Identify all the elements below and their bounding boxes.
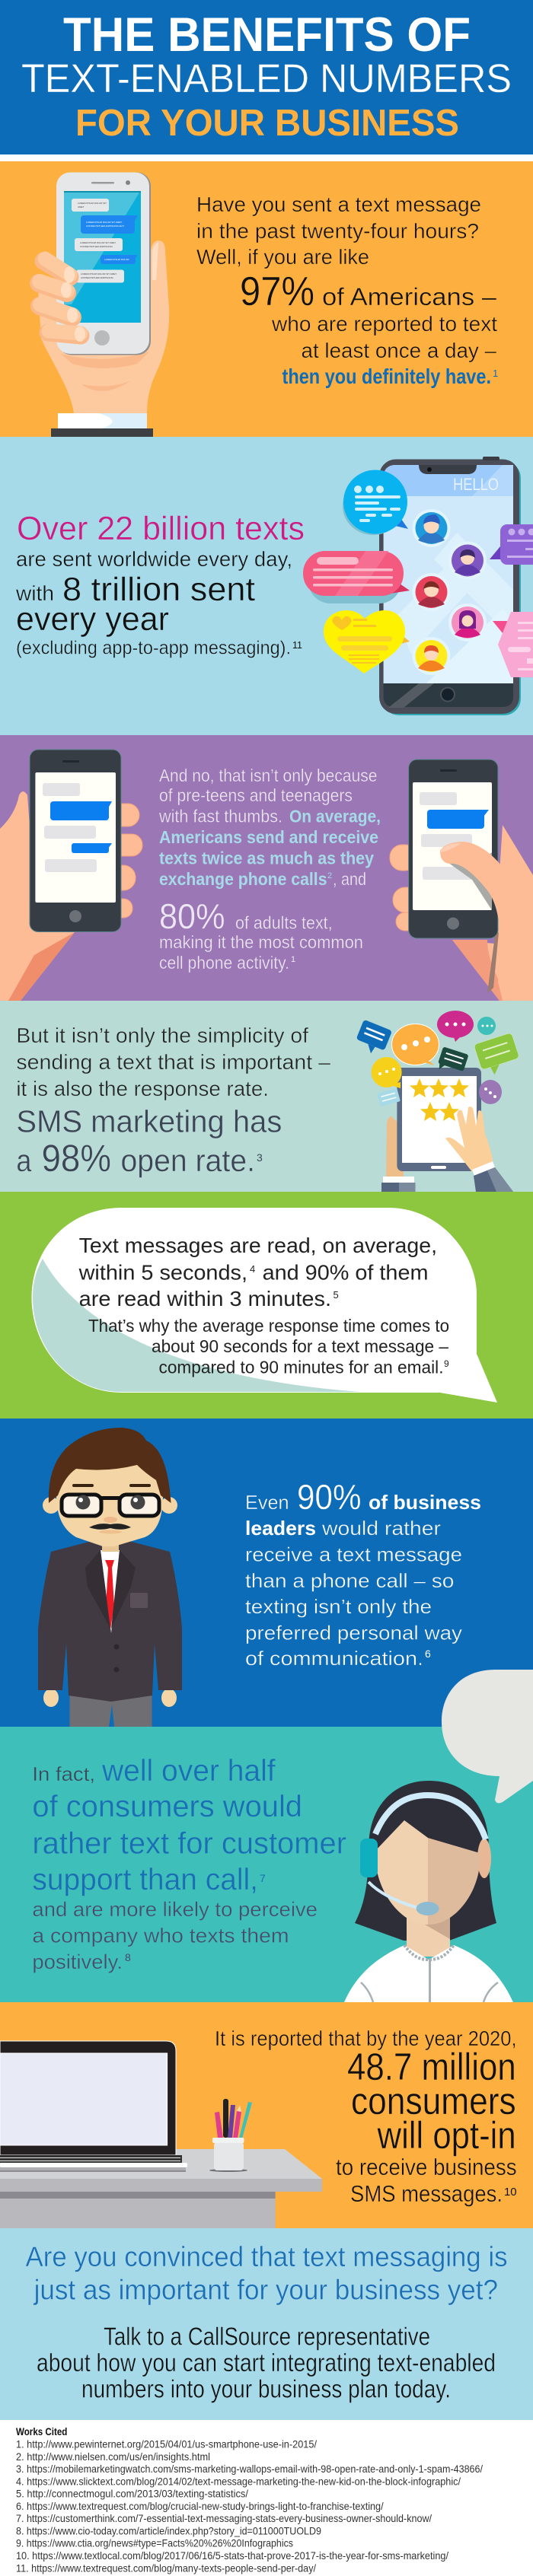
text block: 22 billion texts: 11: [292, 639, 302, 651]
text block: customer support: positively.: [32, 1950, 123, 1973]
text block: intro: Well, if you are like: [196, 245, 369, 269]
text block: customer support: [32, 1754, 346, 1973]
laptop: [0, 2041, 187, 2172]
text block: open rate: 3: [257, 1151, 263, 1164]
text block: open rate: it is also the response rate.: [16, 1077, 269, 1100]
panel: works cited: 3. https://mobilemarketingwatch.com/sms-marketing-wallops-email-with-98-open-rate-and-only-1-spam-43866/: [16, 2463, 483, 2475]
text block: intro: Have you sent a text message: [196, 193, 481, 216]
text block: customer support: support than call,: [32, 1863, 258, 1896]
text block: fast thumbs: , and: [333, 869, 366, 889]
title: FOR YOUR BUSINESS: [75, 103, 459, 144]
question heading: [26, 2241, 507, 2306]
text block: 48.7 million consumers: to receive business: [336, 2154, 517, 2180]
icon: hand holding phone: CONSECTETUER ADIPISCING: [81, 276, 114, 279]
text block: call to action: Talk to a CallSource representative: [104, 2323, 430, 2351]
panel: call to action: [0, 2228, 533, 2420]
title: [21, 8, 512, 144]
text block: 48.7 million consumers: SMS messages.: [350, 2180, 503, 2207]
text block: 48.7 million consumers: consumers: [351, 2080, 516, 2122]
text block: fast thumbs: Americans send and receive: [159, 827, 378, 847]
text block: fast thumbs: with fast thumbs.: [158, 807, 282, 826]
panel: works cited: 4. https://www.slicktext.com/blog/2014/02/text-message-marketing-the-new-kid-on-the-block-infographic/: [16, 2475, 461, 2487]
panel: header: [0, 0, 533, 154]
text block: business leaders: leaders: [245, 1517, 316, 1540]
icon: hand holding phone: LOREM IPSUM DOLOR SIT AMET,: [86, 221, 123, 224]
text block: fast thumbs: exchange phone calls: [159, 869, 327, 889]
text block: 22 billion texts: every year: [16, 600, 169, 638]
text block: business leaders: of communication.: [245, 1647, 423, 1670]
icon: hand holding phone: CONSECTETUER ADIPISCING ELIT: [86, 224, 124, 228]
text block: customer support: In fact,: [32, 1762, 95, 1785]
text block: business leaders: receive a text message: [245, 1543, 462, 1566]
panel: works cited: 7. https://customerthink.com/7-essential-text-messaging-stats-every-business-owner-should-know/: [16, 2512, 432, 2524]
text block: business leaders: texting isn’t only the: [245, 1595, 432, 1618]
panel: works cited: 10. https://www.textlocal.com/blog/2017/06/16/5-stats-that-prove-2017-is-the-year-for-sms-marketing/: [16, 2549, 448, 2562]
text block: fast thumbs: 80%: [159, 896, 225, 936]
text block: open rate: a: [16, 1143, 32, 1178]
text block: open rate: SMS marketing has: [16, 1103, 282, 1138]
bubbles: [353, 1011, 522, 1107]
text block: response time: compared to 90 minutes for an email.: [158, 1358, 443, 1377]
text block: 48.7 million consumers: 10: [504, 2186, 517, 2199]
text block: fast thumbs: of pre-teens and teenagers: [159, 785, 353, 805]
text block: 22 billion texts: Over 22 billion texts: [17, 510, 305, 547]
text block: fast thumbs: On average,: [289, 807, 381, 826]
text block: customer support: a company who texts them: [32, 1924, 289, 1947]
text block: 22 billion texts: [15, 510, 305, 659]
text block: customer support: well over half: [101, 1754, 276, 1788]
avatar: yellow: [413, 637, 451, 675]
icon: right hand tapping phone: [390, 759, 533, 1001]
text block: fast thumbs: And no, that isn’t only because: [159, 766, 378, 785]
bubble: pink: [303, 551, 410, 603]
panel: business leaders: [0, 1419, 533, 1727]
panel: orange intro: [0, 161, 533, 437]
panel: works cited: 6. https://www.textrequest.com/blog/crucial-new-study-brings-light-to-franchise-texting/: [16, 2500, 384, 2512]
text block: customer support: 7: [260, 1872, 266, 1884]
text block: intro: 97%: [240, 269, 314, 314]
icon: businessman: [38, 1428, 182, 1727]
pen cup: [209, 2099, 252, 2172]
text block: 48.7 million consumers: will opt-in: [377, 2114, 516, 2157]
text block: 48.7 million consumers: [215, 2027, 517, 2207]
icon: hand holding phone: LOREM IPSUM DOLOR SIT AMET,: [81, 272, 117, 275]
text block: call to action: [37, 2323, 496, 2403]
text block: response time: and 90% of them: [263, 1261, 428, 1285]
text block: 22 billion texts: 8 trillion sent: [62, 571, 255, 608]
text block: open rate: 98%: [41, 1137, 111, 1180]
text block: fast thumbs: making it the most common: [159, 932, 363, 952]
panel: 48.7 million consumers: [0, 2002, 533, 2228]
panel: works cited: 9. https://www.ctia.org/news#type=Facts%20%26%20Infographics: [16, 2537, 293, 2549]
speech bubble: [32, 1208, 497, 1403]
panel: open rate: [0, 1001, 533, 1192]
text block: business leaders: 6: [425, 1648, 431, 1660]
text block: customer support: 8: [125, 1951, 131, 1963]
text block: open rate: open rate.: [120, 1143, 255, 1178]
bubble: yellow heart: [324, 610, 410, 673]
text block: intro: in the past twenty-four hours?: [196, 219, 479, 243]
panel: works cited: 1. http://www.pewinternet.org/2015/04/01/us-smartphone-use-in-2015/: [16, 2438, 317, 2450]
text block: response time: 5: [334, 1289, 339, 1301]
text block: 22 billion texts: with: [15, 581, 54, 605]
panel: works cited: 5. http://connectmogul.com/2013/03/texting-statistics/: [16, 2488, 248, 2500]
icon: tablet with rating stars and chat bubbles: [353, 1011, 522, 1192]
question heading: Are you convinced that text messaging is: [26, 2241, 507, 2272]
title: TEXT-ENABLED NUMBERS: [21, 56, 512, 101]
text block: response time: within 5 seconds,: [78, 1261, 247, 1285]
icon: hand holding phone: AMET: [78, 205, 85, 209]
icon: support agent with headset: [344, 1781, 513, 2002]
icon: smartphone with chat bubbles: HELLO: [453, 475, 499, 494]
text block: open rate: [16, 1024, 330, 1180]
panel: response time: [0, 1192, 533, 1419]
text block: business leaders: would rather: [321, 1517, 441, 1540]
text block: intro: 1: [493, 368, 498, 379]
icon: smartphone with chat bubbles: [303, 457, 533, 715]
icon: hand holding phone: CONSECTETUER ADIPISCING: [80, 245, 113, 248]
avatar: red: [413, 573, 451, 611]
icon: hand holding phone: [38, 172, 169, 437]
text block: fast thumbs: of adults text,: [235, 913, 333, 933]
text block: intro: at least once a day –: [302, 339, 496, 362]
text block: intro: of Americans –: [322, 283, 496, 310]
text block: business leaders: [245, 1477, 481, 1670]
text block: intro: [196, 193, 498, 388]
text block: call to action: numbers into your business plan today.: [81, 2375, 451, 2403]
avatar: boy blue: [413, 509, 451, 547]
text block: 22 billion texts: are sent worldwide every day,: [16, 547, 292, 571]
title: THE BENEFITS OF: [63, 8, 471, 62]
text block: intro: who are reported to text: [271, 312, 497, 336]
bubble: blue: [343, 470, 408, 535]
icon: hand holding phone: LOREM IPSUM DOLOR: [104, 258, 129, 261]
icon: laptop on desk: [0, 2041, 322, 2228]
text block: customer support: of consumers would: [32, 1790, 302, 1823]
text block: fast thumbs: texts twice as much as they: [159, 848, 374, 868]
avatar: pink: [448, 603, 487, 642]
text block: fast thumbs: cell phone activity.: [159, 953, 289, 973]
text block: intro: then you definitely have.: [282, 365, 491, 388]
text block: customer support: and are more likely to perceive: [32, 1898, 318, 1921]
text block: response time: are read within 3 minutes.: [79, 1287, 331, 1310]
text block: business leaders: preferred personal way: [245, 1621, 462, 1644]
panel: works cited: 2. http://www.nielsen.com/us/en/insights.html: [16, 2450, 210, 2463]
text block: open rate: sending a text that is important –: [16, 1050, 330, 1074]
icon: hand holding phone: LOREM IPSUM DOLOR SIT AMET,: [80, 241, 116, 244]
bubble: pink hexagon: [493, 612, 533, 677]
panel: 22 billion texts: [0, 437, 533, 735]
text block: response time: [78, 1234, 449, 1377]
hand: right tapping: [445, 1107, 513, 1192]
bubble: purple: [490, 524, 533, 565]
text block: fast thumbs: 2: [327, 871, 332, 880]
text block: open rate: But it isn’t only the simplicity of: [16, 1024, 308, 1047]
text block: business leaders: 90%: [297, 1477, 361, 1517]
text block: response time: Text messages are read, on average,: [79, 1234, 437, 1257]
text block: customer support: rather text for customer: [32, 1827, 346, 1861]
text block: response time: 9: [444, 1358, 449, 1369]
text block: response time: 4: [250, 1263, 255, 1275]
avatar: purple: [448, 542, 487, 580]
text block: fast thumbs: 1: [291, 955, 295, 964]
panel: works cited: 11. https://www.textrequest.com/blog/many-texts-people-send-per-day/: [16, 2562, 316, 2574]
icon: hand holding phone: LOREM IPSUM DOLOR SIT: [78, 202, 107, 205]
text block: business leaders: Even: [245, 1491, 289, 1514]
speech bubble: grey: [442, 1670, 533, 1803]
hand: left: [381, 1116, 416, 1192]
text block: fast thumbs: [158, 766, 381, 973]
question heading: just as important for your business yet?: [34, 2275, 498, 2306]
panel: works cited: Works Cited: [16, 2425, 67, 2437]
text block: business leaders: of business: [369, 1491, 481, 1514]
text block: business leaders: than a phone call – so: [245, 1569, 454, 1592]
panel: fast thumbs: [0, 735, 533, 1001]
panel: works cited: [16, 2425, 483, 2574]
panel: works cited: 8. https://www.cio-today.com/article/index.php?story_id=011000TUOLD9: [16, 2525, 321, 2537]
panel: customer support: [0, 1670, 533, 2002]
text block: 22 billion texts: (excluding app-to-app messaging).: [16, 638, 291, 659]
icon: left hand holding phone: [0, 750, 142, 1001]
text block: response time: That’s why the average response time comes to: [88, 1316, 449, 1336]
text block: response time: about 90 seconds for a text message –: [152, 1336, 448, 1356]
